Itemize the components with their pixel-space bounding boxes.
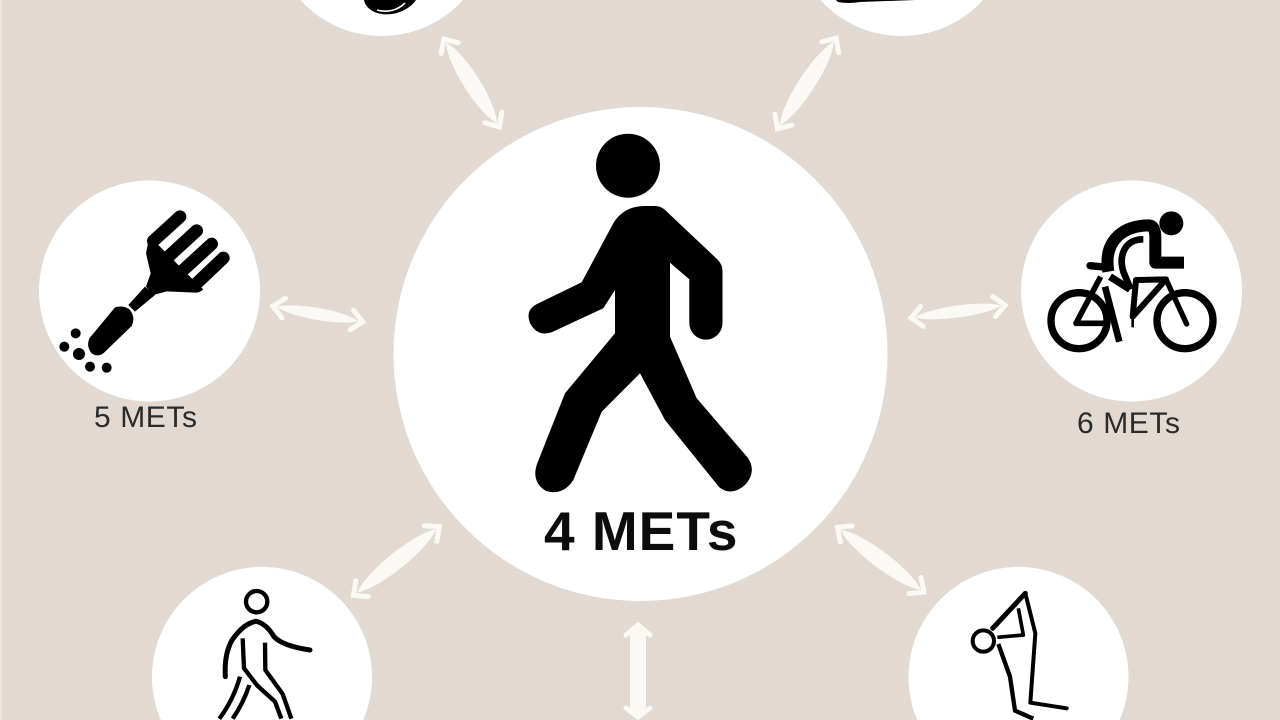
arrow: right double arrow: [910, 295, 1006, 328]
icon: bending person: [973, 593, 1067, 719]
panel: top-right activity circle: [820, 0, 983, 36]
icon: garden fork: [59, 217, 223, 373]
label: 4 METs: 4 METs: [544, 500, 738, 562]
arrow: bottom-right double arrow: [831, 519, 930, 600]
panel: bottom-right bending circle: [909, 567, 1128, 720]
icon: cyclist: [1051, 211, 1213, 349]
arrow: bottom-left double arrow: [347, 519, 445, 603]
panel: central 4 METs walking circle: [394, 107, 888, 601]
panel: top-left activity circle: [300, 0, 463, 36]
panel: bottom-left walking circle: [152, 567, 372, 720]
icon: outlined walker: [219, 591, 310, 719]
icon: walking person: [529, 134, 752, 492]
label: 5 METs: 5 METs: [94, 401, 198, 434]
icon: cropped shoe sole: [836, 0, 915, 3]
panel: 5 METs gardening circle: [39, 180, 260, 402]
arrow: left double arrow: [271, 296, 364, 332]
icon: cropped shoe: [364, 0, 416, 14]
arrow: top-right double arrow: [769, 33, 845, 134]
label: 6 METs: 6 METs: [1077, 407, 1181, 440]
arrow: top-left double arrow: [435, 34, 508, 132]
arrow: bottom double arrow: [626, 625, 650, 717]
panel: 6 METs cycling circle: [1021, 180, 1242, 402]
